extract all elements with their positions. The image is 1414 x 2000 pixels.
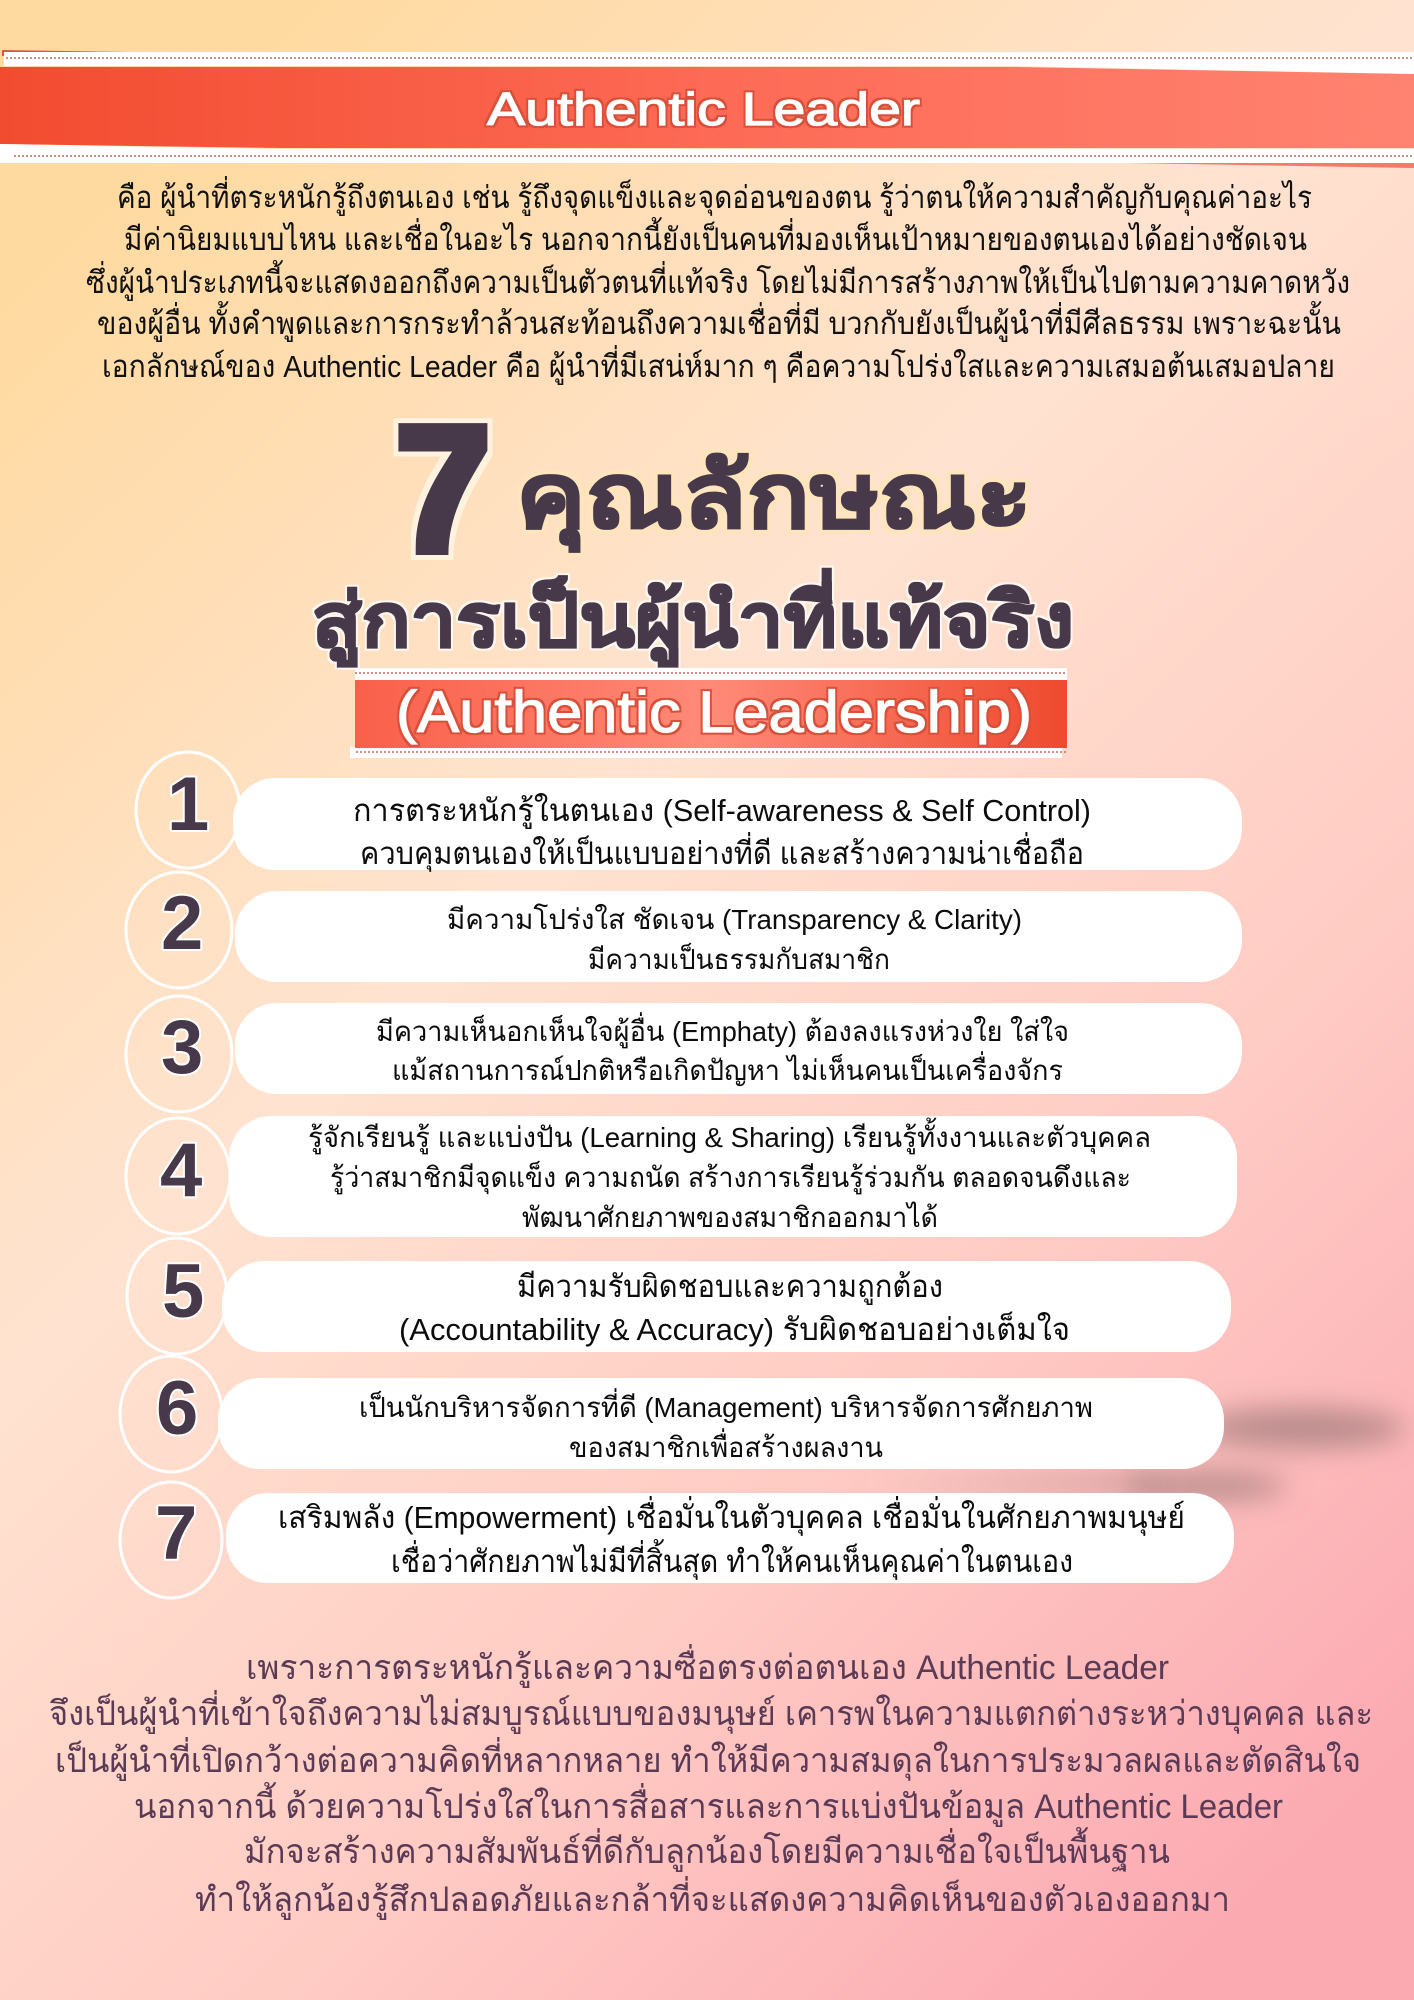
intro paragraph: คือ ผู้นำที่ตระหนักรู้ถึงตนเอง เช่น รู้ถึงจุดแข็งและจุดอ่อนของตน รู้ว่าตนให้ความสำคัญกับคุณค่าอะไร — [117, 176, 1312, 217]
text 7 — [278, 1496, 1185, 1581]
number ring 7 — [120, 1482, 222, 1598]
closing paragraph: เพราะการตระหนักรู้และความซื่อตรงต่อตนเอง Authentic Leader — [246, 1644, 1169, 1688]
number 6: 6 — [156, 1366, 198, 1451]
number 5: 5 — [162, 1249, 204, 1334]
number 2: 2 — [161, 881, 203, 966]
pill 3 — [235, 1003, 1242, 1094]
step 4 — [126, 1116, 1237, 1237]
text 1: ควบคุมตนเองให้เป็นแบบอย่างที่ดี และสร้างความน่าเชื่อถือ — [360, 832, 1084, 873]
text 2: มีความเป็นธรรมกับสมาชิก — [588, 942, 890, 975]
pill 4 — [229, 1116, 1237, 1237]
text 1: การตระหนักรู้ในตนเอง (Self-awareness & Self Control) — [353, 793, 1091, 829]
text 6 — [359, 1388, 1093, 1463]
pill 5 — [222, 1261, 1231, 1352]
text 6: ของสมาชิกเพื่อสร้างผลงาน — [569, 1428, 883, 1463]
text 2: มีความโปร่งใส ชัดเจน (Transparency & Clarity) — [447, 903, 1022, 935]
banner: Authentic Leader — [0, 50, 1414, 168]
number ring 1 — [136, 752, 240, 868]
number 3: 3 — [161, 1005, 203, 1090]
number 7: 7 — [155, 1491, 197, 1576]
subtitle text: (Authentic Leadership) — [396, 680, 1032, 745]
text 5: (Accountability & Accuracy) รับผิดชอบอย่างเต็มใจ — [399, 1311, 1070, 1347]
text 3 — [376, 1012, 1069, 1086]
text 4: รู้จักเรียนรู้ และแบ่งปัน (Learning & Sharing) เรียนรู้ทั้งงานและตัวบุคคล — [308, 1117, 1151, 1155]
step 7 — [120, 1482, 1234, 1598]
step 1 — [136, 752, 1242, 873]
text 2 — [447, 903, 1022, 975]
closing paragraph: จึงเป็นผู้นำที่เข้าใจถึงความไม่สมบูรณ์แบบของมนุษย์ เคารพในความแตกต่างระหว่างบุคคล และ — [49, 1690, 1373, 1734]
step 2 — [126, 872, 1242, 988]
text 1 — [353, 793, 1091, 873]
text 3: มีความเห็นอกเห็นใจผู้อื่น (Emphaty) ต้องลงแรงห่วงใย ใส่ใจ — [376, 1012, 1069, 1049]
text 7: เชื่อว่าศักยภาพไม่มีที่สิ้นสุด ทำให้คนเห็นคุณค่าในตนเอง — [391, 1539, 1073, 1581]
closing paragraph: ทำให้ลูกน้องรู้สึกปลอดภัยและกล้าที่จะแสดงความคิดเห็นของตัวเองออกมา — [195, 1876, 1230, 1920]
intro paragraph: ของผู้อื่น ทั้งคำพูดและการกระทำล้วนสะท้อนถึงความเชื่อที่มี บวกกับยังเป็นผู้นำที่มีศีลธรรม เพราะฉะนั้น — [97, 301, 1341, 342]
pill 7 — [226, 1493, 1234, 1583]
text 4: รู้ว่าสมาชิกมีจุดแข็ง ความถนัด สร้างการเรียนรู้ร่วมกัน ตลอดจนดึงและ — [330, 1160, 1131, 1195]
text 3: แม้สถานการณ์ปกติหรือเกิดปัญหา ไม่เห็นคนเป็นเครื่องจักร — [392, 1051, 1063, 1086]
intro paragraph — [86, 176, 1350, 385]
step 3 — [126, 996, 1242, 1112]
text 5: มีความรับผิดชอบและความถูกต้อง — [517, 1269, 943, 1305]
heading line one: คุณลักษณะ — [516, 447, 1032, 553]
intro paragraph: เอกลักษณ์ของ Authentic Leader คือ ผู้นำที่มีเสน่ห์มาก ๆ คือความโปร่งใสและความเสมอต้นเสมอปลาย — [102, 345, 1335, 385]
text 4: พัฒนาศักยภาพของสมาชิกออกมาได้ — [522, 1202, 938, 1233]
decorative soft shadows — [860, 1408, 1405, 1500]
subtitle banner — [350, 668, 1067, 758]
big number 7: 7 — [395, 389, 491, 590]
heading line two: สู่การเป็นผู้นำที่แท้จริง — [312, 568, 1074, 667]
number ring 6 — [120, 1356, 222, 1472]
number ring 2 — [126, 872, 232, 988]
closing paragraph: เป็นผู้นำที่เปิดกว้างต่อความคิดที่หลากหลาย ทำให้มีความสมดุลในการประมวลผลและตัดสินใจ — [55, 1737, 1361, 1781]
number 4: 4 — [160, 1128, 202, 1213]
number ring 3 — [126, 996, 232, 1112]
closing paragraph — [49, 1644, 1373, 1920]
closing paragraph: มักจะสร้างความสัมพันธ์ที่ดีกับลูกน้องโดยมีความเชื่อใจเป็นพื้นฐาน — [244, 1827, 1170, 1872]
step 6 — [120, 1356, 1224, 1472]
pill 6 — [218, 1378, 1224, 1469]
pill 1 — [233, 778, 1242, 870]
banner title: Authentic Leader — [487, 83, 920, 135]
intro paragraph: มีค่านิยมแบบไหน และเชื่อในอะไร นอกจากนี้ยังเป็นคนที่มองเห็นเป้าหมายของตนเองได้อย่างชัดเจน — [124, 217, 1307, 257]
number ring 5 — [127, 1238, 227, 1354]
step 5 — [127, 1238, 1231, 1354]
pill 2 — [235, 891, 1242, 982]
main heading — [312, 389, 1074, 667]
number 1: 1 — [167, 762, 209, 847]
closing paragraph: นอกจากนี้ ด้วยความโปร่งใสในการสื่อสารและการแบ่งปันข้อมูล Authentic Leader — [134, 1782, 1283, 1827]
text 6: เป็นนักบริหารจัดการที่ดี (Management) บริหารจัดการศักยภาพ — [359, 1388, 1093, 1423]
text 5 — [399, 1269, 1070, 1347]
number ring 4 — [126, 1118, 230, 1234]
text 4 — [308, 1117, 1151, 1233]
text 7: เสริมพลัง (Empowerment) เชื่อมั่นในตัวบุคคล เชื่อมั่นในศักยภาพมนุษย์ — [278, 1496, 1185, 1537]
